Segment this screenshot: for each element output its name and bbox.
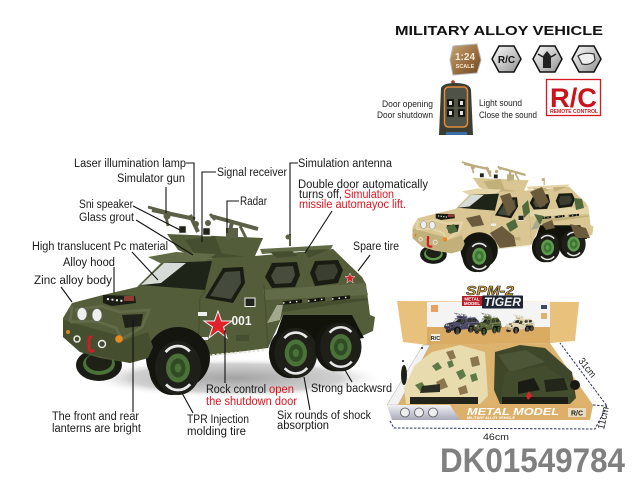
remote label: door shutdown: Door shutdown [377, 110, 433, 120]
R/C remote control badge: R/C [550, 83, 597, 113]
camouflage vehicle [413, 162, 594, 272]
callout: strong backward: Strong backwsrd [311, 383, 392, 395]
box lid: R/C [431, 336, 440, 342]
mini vehicles on lid [444, 313, 535, 335]
icon: 1:24 scale badge: 1:24 [455, 52, 475, 63]
main vehicle: green armored truck [63, 207, 375, 395]
callout: front and rear lanterns [52, 320, 142, 435]
red star emblem [204, 311, 232, 338]
dimension: 11cm: 11cm [596, 406, 612, 431]
logo: SPM-2 Tiger: TIGER [484, 295, 521, 309]
callout: TPR injection tire: molding tire [187, 426, 246, 438]
R/C remote control badge: REMOTE CONTROL [550, 109, 599, 115]
remote label: door opening: Door opening [382, 99, 433, 109]
logo: SPM-2 Tiger: METAL [464, 296, 480, 302]
toy vehicles in tray, green [494, 345, 580, 404]
main vehicle shadow [85, 358, 385, 398]
logo: SPM-2 Tiger: SPM-2 [466, 283, 515, 298]
toy vehicles in tray, camouflage [401, 345, 488, 404]
remote control [439, 80, 473, 135]
icon: sound hexagon [572, 46, 601, 72]
callout: laser illumination lamp [74, 158, 194, 220]
callout: six rounds of shock absorption: Six rounds of shock [277, 410, 371, 422]
callout: simulator gun [117, 173, 185, 213]
callout: spare tire: Spare tire [353, 241, 399, 253]
title: MILITARY ALLOY VEHICLE [395, 23, 603, 38]
callout: double door and missile lift [298, 179, 428, 253]
callout: sni speaker [79, 199, 180, 230]
callout: TPR injection tire [182, 393, 249, 438]
callout: double door and missile lift: Simulation [344, 189, 394, 201]
logo: SPM-2 Tiger: MODEL [464, 301, 480, 306]
box lid [397, 301, 579, 345]
callout: front and rear lanterns: lanterns are bright [52, 423, 142, 435]
callout: radar: Radar [240, 196, 267, 208]
icon: door hexagon [533, 46, 562, 72]
callout: glass grout [79, 212, 193, 255]
callout: zinc alloy body [34, 275, 112, 302]
callout: signal receiver [202, 167, 287, 242]
icon: 1:24 scale badge: SCALE [456, 64, 475, 70]
box front panel: MILITARY ALLOY VEHICLE [467, 416, 516, 420]
product code: DK01549784 [440, 442, 625, 480]
callout: six rounds of shock absorption [277, 377, 371, 432]
callout: six rounds of shock absorption: absorption [277, 420, 329, 432]
callout: glass grout: Glass grout [79, 212, 135, 224]
callout: double door and missile lift: Double door automatically [298, 179, 428, 191]
tray [387, 343, 593, 405]
number 001: 001 [232, 313, 252, 328]
callout: spare tire [353, 241, 399, 271]
icon: 1:24 scale badge [450, 44, 481, 75]
callout: rock control: the shutdown door [206, 396, 297, 408]
camouflage patches [466, 187, 590, 248]
remote label: close the sound: Close the sound [479, 110, 537, 120]
icon: R/C hexagon: R/C [498, 55, 515, 66]
callout: front and rear lanterns: The front and rear [52, 411, 139, 423]
callout: laser illumination lamp: Laser illumination lamp [74, 158, 186, 170]
callout: zinc alloy body: Zinc alloy body [34, 275, 112, 287]
dimension: 46cm: 46cm [483, 432, 509, 443]
icon: R/C hexagon [492, 46, 521, 72]
callout: signal receiver: Signal receiver [217, 167, 287, 179]
callout: radar [227, 196, 267, 233]
red tow hook [428, 236, 432, 247]
box front panel [387, 405, 593, 420]
callout: strong backward [311, 370, 392, 395]
callout: high translucent PC material [32, 241, 168, 280]
callout: simulator gun: Simulator gun [117, 173, 185, 185]
box front panel: R/C [571, 410, 583, 418]
callout: alloy hood: Alloy hood [63, 257, 115, 269]
box front panel: METAL MODEL [467, 407, 559, 418]
logo: SPM-2 Tiger [462, 283, 523, 309]
product display box [387, 283, 593, 420]
remote label: light sound: Light sound [479, 98, 522, 108]
callout: TPR injection tire: TPR Injection [187, 414, 249, 426]
small red star [345, 273, 355, 283]
callout: alloy hood [63, 257, 115, 293]
feature icons row [450, 44, 601, 75]
callout: rock control: open [269, 384, 294, 396]
callout: double door and missile lift: turns off, [299, 189, 342, 201]
callout: sni speaker: Sni speaker [79, 199, 133, 211]
dimension: 31cm: 31cm [576, 356, 598, 380]
callout: double door and missile lift: missile automayoc lift. [299, 199, 406, 211]
callout: rock control [206, 330, 297, 408]
callout: simulation antenna [290, 158, 393, 235]
callout: rock control: Rock control [206, 384, 266, 396]
callout: simulation antenna: Simulation antenna [298, 158, 393, 170]
callout: high translucent PC material: High translucent Pc material [32, 241, 168, 253]
dimension lines [390, 343, 607, 429]
